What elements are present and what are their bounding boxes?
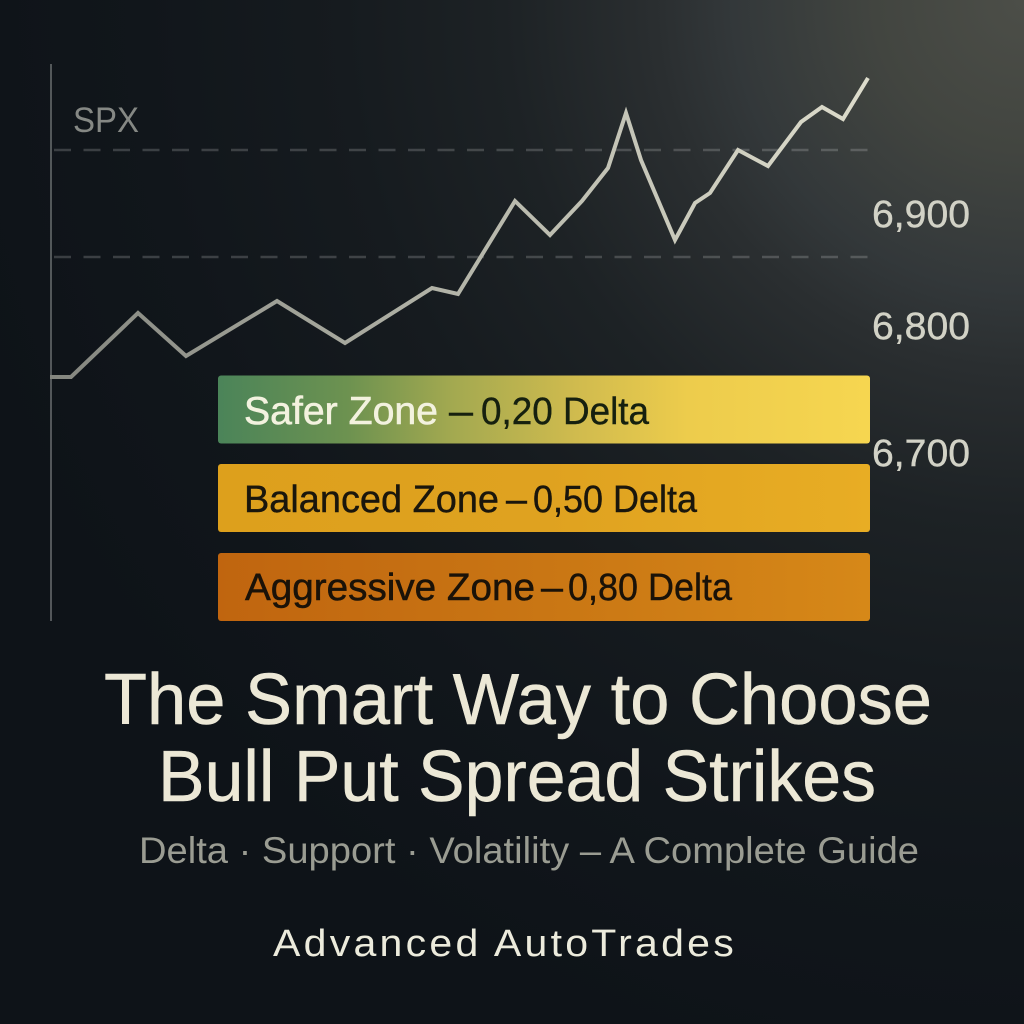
panel: balanced zone [218,464,870,532]
line chart: SPX [50,64,869,621]
panel: aggressive zone: Aggressive Zone [245,567,535,609]
title: The Smart Way to Choose [104,659,932,740]
panel: balanced zone: – [506,479,528,521]
panel: aggressive zone [218,553,870,621]
panel: safer zone: 0,20 Delta [481,391,650,433]
panel: balanced zone: 0,50 Delta [533,479,698,521]
axis label: 6,900: 6,900 [872,194,970,236]
panel: safer zone: Safer Zone [244,390,438,433]
panel: aggressive zone: – [541,567,564,609]
axis label: 6,800: 6,800 [872,306,970,348]
title: Bull Put Spread Strikes [158,736,876,817]
brand name: Advanced AutoTrades [273,923,737,965]
panel: safer zone: – [449,390,473,433]
title [104,659,932,817]
axis label: 6,700: 6,700 [872,433,970,475]
subtitle: Delta · Support · Volatility – A Complete Guide [139,829,919,871]
axis label: SPX: SPX [73,101,139,140]
panel: balanced zone: Balanced Zone [244,479,499,521]
panel: aggressive zone: 0,80 Delta [568,567,733,609]
panel: safer zone [218,376,870,444]
